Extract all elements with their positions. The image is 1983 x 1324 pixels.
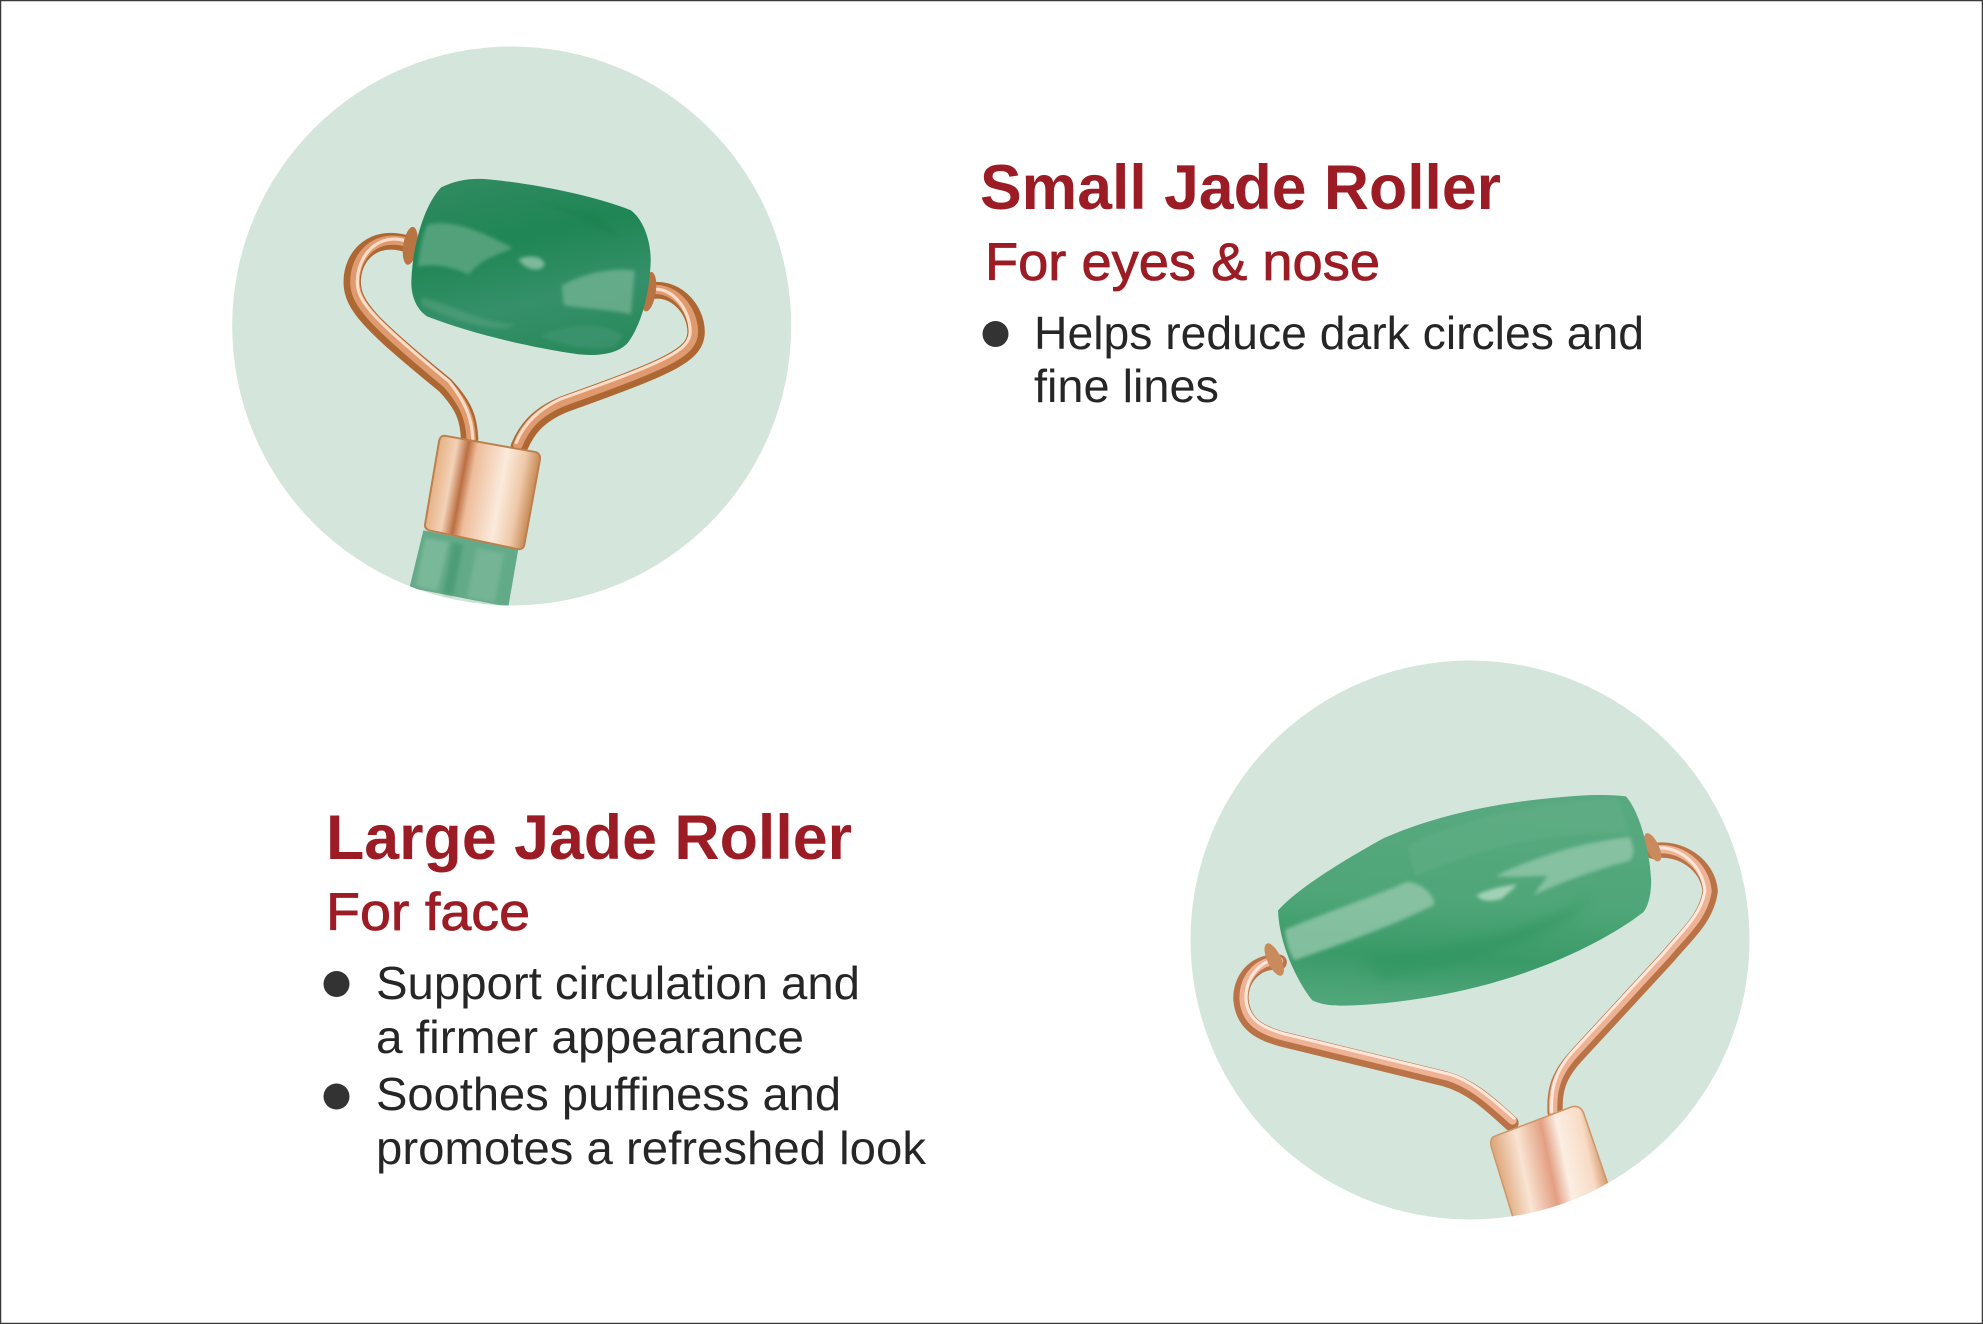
benefit text 1 — [376, 957, 860, 1063]
right wire — [1552, 848, 1710, 1112]
panel: small jade roller image — [232, 46, 791, 607]
right wire — [516, 289, 696, 446]
heading: Large Jade Roller — [326, 803, 852, 873]
panel: small jade roller text — [980, 153, 1644, 412]
collar — [425, 436, 540, 549]
bullet dot 2 — [324, 1084, 350, 1110]
bullet dot 1 — [324, 971, 350, 997]
benefit text 1: a firmer appearance — [376, 1011, 804, 1063]
benefit text — [1034, 307, 1644, 412]
subheading: For face — [326, 883, 530, 942]
jade stone — [1278, 795, 1651, 1006]
benefit text 2: Soothes puffiness and — [376, 1068, 841, 1120]
benefit text: fine lines — [1034, 360, 1219, 412]
mint circle background — [1190, 660, 1750, 1220]
bullet dot — [982, 321, 1008, 347]
mint circle background — [232, 46, 791, 606]
knobs — [1261, 831, 1665, 978]
benefit text 2 — [376, 1068, 927, 1174]
icon: large jade roller — [1241, 795, 1710, 1221]
benefit text 2: promotes a refreshed look — [376, 1122, 927, 1174]
jade stone — [411, 179, 651, 355]
icon: small jade roller — [352, 179, 696, 607]
left wire — [1241, 960, 1514, 1123]
panel: large jade roller text — [324, 803, 927, 1174]
panel: large jade roller image — [1190, 660, 1750, 1221]
knobs — [401, 226, 659, 312]
heading: Small Jade Roller — [980, 153, 1501, 223]
subheading: For eyes & nose — [985, 233, 1380, 292]
benefit text: Helps reduce dark circles and — [1034, 307, 1644, 359]
handle — [410, 530, 518, 607]
benefit text 1: Support circulation and — [376, 957, 860, 1009]
left wire — [352, 239, 473, 439]
collar — [1491, 1106, 1609, 1221]
